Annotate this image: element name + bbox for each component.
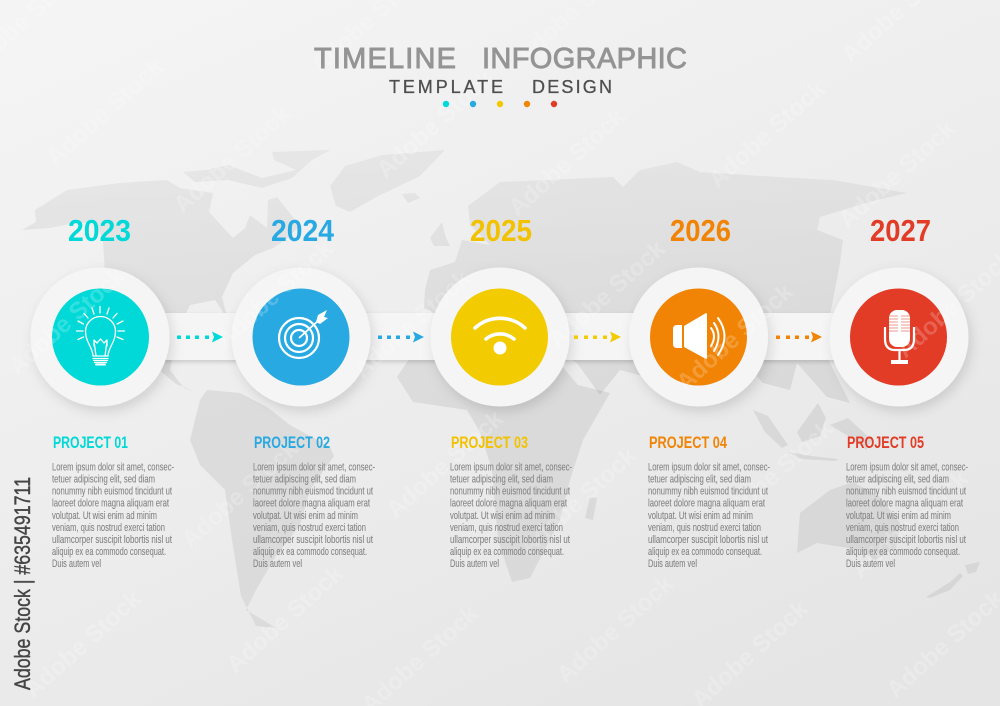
project 05 text: tetuer adipiscing elit, sed diam (846, 474, 949, 486)
connector band (100, 313, 900, 360)
map: north america (22, 180, 300, 392)
watermarks: Adobe Stock (168, 100, 296, 219)
project 01 text: nonummy nibh euismod tincidunt ut (52, 486, 172, 498)
project 03 text: Duis autem vel (450, 558, 499, 570)
watermarks: Adobe Stock (41, 53, 169, 172)
map: greenland (330, 150, 445, 212)
watermarks: Adobe Stock (703, 75, 831, 194)
step 4 circle (629, 268, 768, 406)
project 05 text (846, 462, 968, 570)
watermarks: Adobe Stock (221, 560, 349, 679)
project 01 text: Lorem ipsum dolor sit amet, consec- (52, 462, 174, 474)
title (314, 43, 687, 107)
project 04 text: nonummy nibh euismod tincidunt ut (648, 486, 768, 498)
arrow 1 (177, 332, 223, 342)
title line 2: TEMPLATE (389, 77, 503, 97)
step 5 circle (830, 268, 968, 406)
project 02 text: tetuer adipiscing elit, sed diam (253, 474, 356, 486)
project 03 text: Lorem ipsum dolor sit amet, consec- (450, 462, 572, 474)
arrow 4 (776, 332, 822, 342)
project 02 text: veniam, quis nostrud exerci tation (253, 522, 366, 534)
project 01 text: veniam, quis nostrud exerci tation (52, 522, 165, 534)
project 03 text: volutpat. Ut wisi enim ad minim (450, 510, 555, 522)
map: uk (430, 222, 450, 246)
project 02 text: laoreet dolore magna aliquam erat (253, 498, 370, 510)
watermarks: Adobe Stock (671, 278, 799, 397)
project 01 text: volutpat. Ut wisi enim ad minim (52, 510, 157, 522)
year labels: 2027 (870, 213, 931, 248)
map: sumatra (753, 410, 788, 448)
watermarks: Adobe Stock (503, 103, 631, 222)
project 04 text: Duis autem vel (648, 558, 697, 570)
project headings: PROJECT 03 (451, 434, 528, 452)
year labels: 2026 (670, 213, 731, 248)
project 02 text: volutpat. Ut wisi enim ad minim (253, 510, 358, 522)
step 1 circle (30, 268, 170, 406)
map: new guinea (830, 418, 872, 450)
title line 1 (314, 43, 687, 75)
project 01 text: ullamcorper suscipit lobortis nisl ut (52, 534, 172, 546)
project 01 text: Duis autem vel (52, 558, 101, 570)
project 02 text: nonummy nibh euismod tincidunt ut (253, 486, 373, 498)
map: arctic islands (183, 150, 330, 188)
watermarks: Adobe Stock (371, 65, 499, 184)
watermarks: Adobe Stock (711, 415, 839, 534)
project 03 text: laoreet dolore magna aliquam erat (450, 498, 567, 510)
project 03 text (450, 462, 572, 570)
watermarks: Adobe Stock (381, 405, 509, 524)
project headings: PROJECT 01 (53, 434, 128, 452)
title line 2 (389, 77, 612, 97)
step 2 circle (232, 268, 370, 406)
project 01 text: tetuer adipiscing elit, sed diam (52, 474, 155, 486)
watermarks: Adobe Stock (211, 235, 339, 354)
project 01 text: laoreet dolore magna aliquam erat (52, 498, 169, 510)
project 04 text: ullamcorper suscipit lobortis nisl ut (648, 534, 768, 546)
map: madagascar (585, 497, 597, 520)
project 05 text: Duis autem vel (846, 558, 895, 570)
stock id label: Adobe Stock | #635491711 (10, 477, 35, 690)
map: africa (397, 340, 610, 582)
map: south america (190, 390, 334, 628)
icon: wifi (475, 318, 525, 354)
project 03 text: ullamcorper suscipit lobortis nisl ut (450, 534, 570, 546)
arrow 2 (378, 332, 424, 342)
icon: speaker (673, 313, 724, 359)
icon: light bulb (76, 306, 124, 364)
project 03 text: nonummy nibh euismod tincidunt ut (450, 486, 570, 498)
project 02 text: Lorem ipsum dolor sit amet, consec- (253, 462, 375, 474)
project 05 text: volutpat. Ut wisi enim ad minim (846, 510, 951, 522)
watermarks: Adobe Stock (551, 570, 679, 689)
title dots (443, 101, 557, 107)
watermarks: Adobe Stock (19, 585, 147, 704)
project 01 text: aliquip ex ea commodo consequat. (52, 546, 166, 558)
project headings: PROJECT 04 (649, 434, 728, 452)
map: java (788, 452, 838, 461)
project headings (53, 434, 924, 452)
project 02 text: ullamcorper suscipit lobortis nisl ut (253, 534, 373, 546)
project 04 text: tetuer adipiscing elit, sed diam (648, 474, 751, 486)
year labels: 2024 (271, 213, 335, 248)
map: australia (797, 482, 900, 560)
project 02 text (253, 462, 375, 570)
project 03 text: aliquip ex ea commodo consequat. (450, 546, 564, 558)
project 01 text (52, 462, 174, 570)
watermarks: Adobe Stock (348, 265, 476, 384)
project 04 text: Lorem ipsum dolor sit amet, consec- (648, 462, 770, 474)
project 04 text (648, 462, 770, 570)
project headings: PROJECT 05 (847, 434, 924, 452)
project 02 text: Duis autem vel (253, 558, 302, 570)
project 04 text: aliquip ex ea commodo consequat. (648, 546, 762, 558)
map: borneo (797, 403, 826, 442)
project 02 text: aliquip ex ea commodo consequat. (253, 546, 367, 558)
project 03 text: tetuer adipiscing elit, sed diam (450, 474, 553, 486)
watermarks: Adobe Stock (846, 465, 974, 584)
icon: target (279, 310, 328, 358)
watermarks: Adobe Stock (3, 262, 131, 381)
project 03 text: veniam, quis nostrud exerci tation (450, 522, 563, 534)
watermarks: Adobe Stock (833, 115, 961, 234)
year labels (68, 213, 931, 248)
watermarks: Adobe Stock (514, 442, 642, 561)
project headings: PROJECT 02 (254, 434, 330, 452)
title line 2: DESIGN (532, 77, 612, 97)
map: new zealand (926, 562, 980, 598)
step 3 circle (430, 268, 570, 406)
project 04 text: laoreet dolore magna aliquam erat (648, 498, 765, 510)
project 04 text: volutpat. Ut wisi enim ad minim (648, 510, 753, 522)
arrow 3 (574, 332, 621, 342)
watermarks: Adobe Stock (543, 235, 671, 354)
project 04 text: veniam, quis nostrud exerci tation (648, 522, 761, 534)
title line 1: INFOGRAPHIC (482, 43, 687, 75)
year labels: 2023 (68, 213, 131, 248)
title line 1: TIMELINE (314, 43, 456, 75)
year labels: 2025 (470, 213, 532, 248)
map: eurasia (424, 162, 907, 403)
icon: microphone (885, 310, 914, 364)
map: iceland (402, 193, 420, 203)
world map (22, 150, 980, 628)
watermarks: Adobe Stock (176, 435, 304, 554)
